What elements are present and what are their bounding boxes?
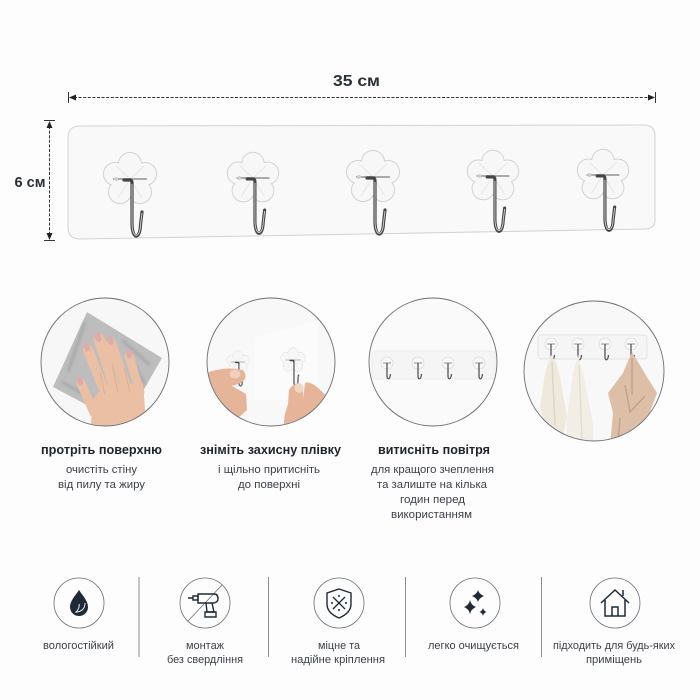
step 1 description: очистіть стіну <box>66 464 138 476</box>
feature: suits any room <box>553 578 675 666</box>
left fingers <box>208 368 247 417</box>
step photo 1: hand wiping with cloth <box>41 298 169 430</box>
icon: water drop <box>54 578 104 628</box>
hook 1 <box>104 152 156 236</box>
step 2 caption <box>200 443 341 491</box>
step 3 description: використанням <box>391 509 472 521</box>
step 3 description: для кращого зчеплення <box>371 464 494 476</box>
step 1 heading: протріть поверхню <box>41 443 162 457</box>
label: приміщень <box>586 654 642 666</box>
four hooks <box>381 357 485 379</box>
label: надійне кріплення <box>291 654 385 666</box>
right small hook <box>281 348 305 386</box>
label <box>553 640 675 666</box>
left small hook <box>227 351 249 386</box>
step 2 description: і щільно притисніть <box>218 464 320 476</box>
label: легко очищується <box>428 640 519 652</box>
strip <box>538 335 647 359</box>
step 3 caption <box>371 443 494 521</box>
icon: shield <box>314 578 364 628</box>
grey cloth <box>53 312 162 404</box>
step 1 caption <box>41 443 162 491</box>
hook 2 <box>227 152 279 233</box>
height dashed arrow <box>44 120 55 240</box>
label: міцне та <box>318 640 361 652</box>
infographic canvas <box>15 75 675 666</box>
label: без свердління <box>167 654 243 666</box>
four hooks <box>545 338 637 360</box>
product: adhesive strip with five hooks <box>68 125 655 239</box>
step photo 2: removing protective film <box>206 298 335 430</box>
hand <box>76 331 145 430</box>
feature: moisture resistant <box>43 578 114 652</box>
step 3 heading: витисніть повітря <box>378 443 490 457</box>
step 2 description: до поверхні <box>238 479 300 491</box>
label: підходить для будь-яких <box>553 640 675 652</box>
height dimension: 6 cm <box>14 120 55 240</box>
dividers <box>139 577 542 657</box>
white towel 2 <box>567 355 593 445</box>
hook 5 <box>577 149 629 230</box>
step 2 description <box>218 464 320 491</box>
step photo 3: pressed strip on wall <box>369 298 497 426</box>
step 1 description: від пилу та жиру <box>58 479 146 491</box>
white towel 1 <box>540 355 567 436</box>
strip <box>372 351 495 379</box>
icon: crossed drill <box>180 578 230 628</box>
label <box>167 640 243 666</box>
feature: strong fastening <box>291 578 385 666</box>
icon: house <box>590 578 640 628</box>
step 2 heading: зніміть захисну плівку <box>200 443 341 457</box>
height label: 6 см <box>14 175 46 191</box>
icon: sparkles <box>450 578 500 628</box>
step 3 description <box>371 464 494 521</box>
feature: no drilling <box>167 578 243 666</box>
step 3 description: годин перед <box>400 494 466 506</box>
label <box>291 640 385 666</box>
width dashed arrow <box>68 92 656 103</box>
right fingers <box>284 382 325 424</box>
step 3 description: та залиште на кілька <box>377 479 488 491</box>
width dimension: 35 cm <box>68 73 656 103</box>
label: вологостійкий <box>43 640 114 652</box>
beige towel <box>608 352 657 445</box>
step 1 description <box>58 464 146 491</box>
transparent strip <box>68 125 655 239</box>
result photo: towels on hooks <box>524 301 664 445</box>
feature: easy to clean <box>428 578 519 652</box>
hook 3 <box>346 150 400 234</box>
label: монтаж <box>186 640 225 652</box>
width label: 35 см <box>333 73 380 90</box>
hook 4 <box>467 150 519 231</box>
